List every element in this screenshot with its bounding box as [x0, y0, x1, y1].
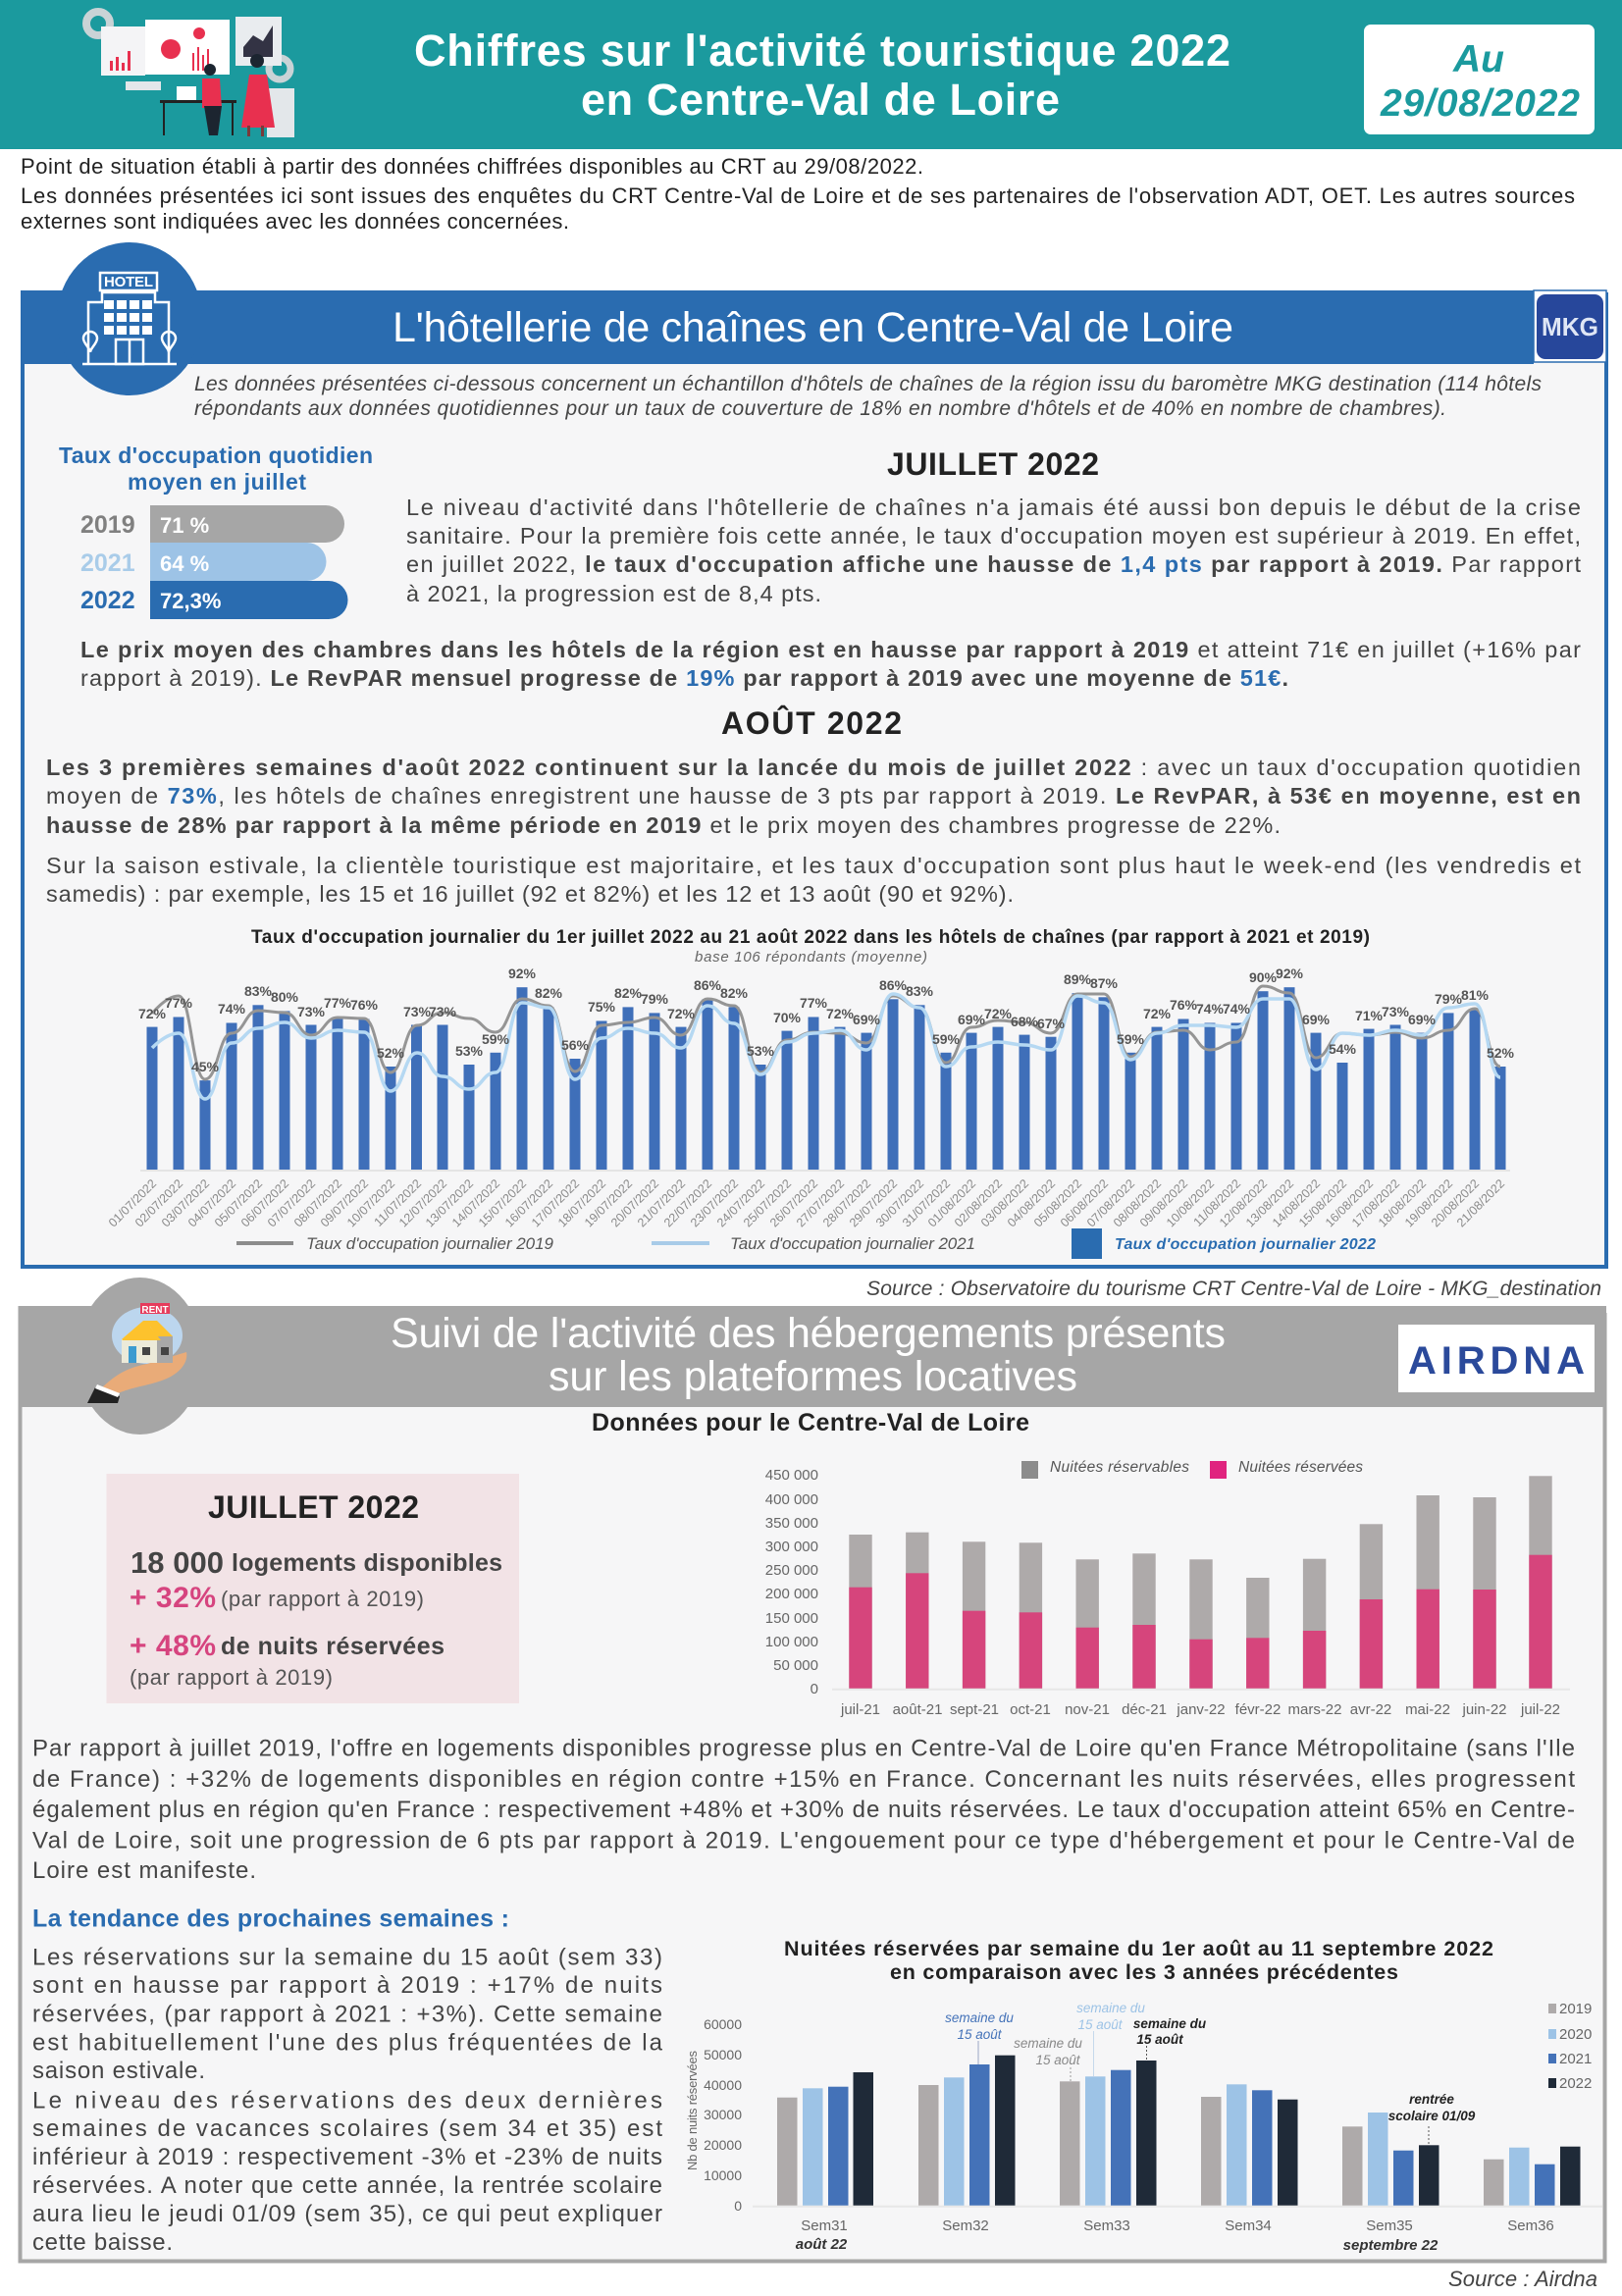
chart: nuitées réservables et réservées: août-21 [893, 1701, 942, 1718]
chart: taux d'occupation journalier: 10/08/2022 [1164, 1176, 1217, 1229]
chart: nuitées par semaine: Sem35 [1366, 2218, 1413, 2234]
chart: nuitées réservables et réservées: déc-21 [1122, 1701, 1167, 1718]
chart: taux d'occupation journalier: Taux d'occupation journalier du 1er juillet 2022 au 21 août 2022 dans les hôtels de chaînes (par rapport à 2021 et 2019) [251, 927, 1370, 948]
chart: nuitées réservables et réservées: avr-22 [1350, 1701, 1391, 1718]
chart: nuitées réservables et réservées: juil-21 [840, 1701, 880, 1718]
chart: taux d'occupation journalier: 08/07/2022 [291, 1176, 344, 1229]
chart: nuitées réservables et réservées: nov-21 [1065, 1701, 1110, 1718]
chart: nuitées réservables et réservées: sept-21 [950, 1701, 999, 1718]
chart: taux d'occupation journalier: 05/08/2022 [1031, 1176, 1084, 1229]
text block: août: samedis) : par exemple, les 15 et 16 juillet (92 et 82%) et les 12 et 13 août (90 et 92%). [46, 881, 1014, 907]
icon: house in hand: RENT [141, 1305, 169, 1316]
chart: taux d'occupation journalier: 54% [1329, 1041, 1357, 1057]
section header bar [21, 290, 1534, 364]
chart: taux d'occupation journalier: 77% [800, 995, 828, 1011]
chart: taux d'occupation journalier: 07/08/2022 [1084, 1176, 1137, 1229]
title [414, 26, 1230, 125]
chart: taux d'occupation journalier: 18/08/2022 [1376, 1176, 1429, 1229]
chart: taux d'occupation journalier: 56% [561, 1037, 590, 1053]
chart: taux d'occupation journalier: 74% [1223, 1001, 1251, 1017]
chart legend: Taux d'occupation journalier 2019 [306, 1234, 554, 1253]
chart: taux d'occupation journalier: 07/07/2022 [265, 1176, 318, 1229]
chart legend: Taux d'occupation journalier 2022 [1115, 1236, 1376, 1253]
text block: tendance: réservées, (par rapport à 2021 : +3%). Cette semaine [32, 2002, 662, 2027]
chart: nuitées réservables et réservées: févr-22 [1235, 1701, 1281, 1718]
chart: nuitées réservables et réservées: 400 000 [765, 1491, 818, 1508]
text block: juillet: en juillet 2022, le taux d'occupation affiche une hausse de 1,4 pts par rapport à 2019. Par rapport [406, 551, 1581, 577]
chart: nuitées réservables et réservées: 50 000 [773, 1657, 818, 1674]
chart: taux d'occupation journalier [106, 927, 1515, 1259]
chart: taux d'occupation journalier: 77% [324, 995, 352, 1011]
chart: taux d'occupation journalier: 73% [1382, 1004, 1410, 1019]
chart: nuitées par semaine: Sem32 [942, 2218, 989, 2234]
chart: taux d'occupation journalier: 10/07/2022 [344, 1176, 397, 1229]
date box: 29/08/2022 [1380, 82, 1580, 125]
text block: juillet: sanitaire. Pour la première fois cette année, le taux d'occupation moyen est supérieur à 2019. En effet, [406, 523, 1581, 548]
chart: taux d'occupation journalier: 26/07/2022 [767, 1176, 820, 1229]
chart: taux d'occupation journalier: 45% [191, 1059, 220, 1074]
chart: taux d'occupation journalier: 12/07/2022 [396, 1176, 449, 1229]
chart: nuitées par semaine: Nuitées réservées par semaine du 1er août au 11 septembre 2022 [784, 1937, 1493, 1960]
chart: taux d'occupation journalier: 72% [138, 1006, 167, 1021]
intro text [21, 154, 1575, 234]
chart: taux d'occupation journalier: 21/07/2022 [635, 1176, 688, 1229]
chart: taux d'occupation journalier: 19/07/2022 [582, 1176, 635, 1229]
callout: juillet 2022 key figures: (par rapport à 2019) [130, 1665, 333, 1690]
text block: août: Sur la saison estivale, la clientèle touristique est majoritaire, et les taux d'occupation sont plus haut le week-end (les vendredis et [46, 853, 1581, 878]
chart: nuitées par semaine: 10000 [704, 2167, 742, 2183]
chart: taux d'occupation journalier: 82% [720, 985, 749, 1001]
chart: taux d'occupation journalier: 19/08/2022 [1402, 1176, 1455, 1229]
chart: nuitées réservables et réservées: 200 000 [765, 1586, 818, 1602]
chart: taux d'occupation journalier: 15/08/2022 [1296, 1176, 1349, 1229]
chart: taux d'occupation journalier: 04/07/2022 [185, 1176, 238, 1229]
chart: taux d'occupation journalier: 59% [932, 1031, 961, 1047]
chart: taux d'occupation journalier: 25/07/2022 [741, 1176, 794, 1229]
icon: hotel [57, 242, 202, 395]
annotation: rentrée scolaire: scolaire 01/09 [1388, 2109, 1476, 2123]
intro text: Point de situation établi à partir des données chiffrées disponibles au CRT au 29/08/2022. [21, 154, 923, 179]
chart: taux d'occupation journalier: 04/08/2022 [1005, 1176, 1058, 1229]
chart: taux d'occupation journalier: 23/07/2022 [688, 1176, 741, 1229]
panel: hôtellerie de chaînes [21, 242, 1606, 1267]
chart: taux d'occupation journalier: 76% [1170, 997, 1198, 1013]
chart legend: 2022 [1559, 2075, 1592, 2092]
chart: taux d'occupation journalier: 69% [853, 1012, 881, 1027]
chart: nuitées réservables et réservées: mai-22 [1405, 1701, 1450, 1718]
icon: people analysing dashboards [86, 12, 294, 137]
logo: AirDNA [1398, 1325, 1595, 1392]
text block: analyse juillet: de France) : +32% de logements disponibles en région contre +15% en France. Concernant les nuits réservées, elles progressent [32, 1766, 1575, 1793]
chart: taux d'occupation journalier: 71% [1355, 1008, 1384, 1023]
chart: taux d'occupation journalier: 05/07/2022 [212, 1176, 265, 1229]
chart: taux d'occupation journalier: 17/07/2022 [529, 1176, 582, 1229]
chart: taux d'occupation moyen en juillet: 2019 [80, 511, 135, 539]
chart: taux d'occupation journalier: 90% [1249, 969, 1278, 985]
callout: juillet 2022 key figures [106, 1474, 519, 1703]
callout: juillet 2022 key figures: 18 000 [131, 1545, 224, 1580]
text block: juillet [80, 495, 1581, 691]
chart: taux d'occupation journalier: 11/08/2022 [1191, 1176, 1243, 1229]
chart: nuitées par semaine [685, 1937, 1602, 2254]
text block: tendance: Le niveau des réservations des deux dernières [32, 2088, 662, 2113]
chart: taux d'occupation journalier: 69% [1302, 1012, 1331, 1027]
italic methodology note: répondants aux données quotidiennes pour un taux de couverture de 18% en nombre d'hôtels et de 40% en nombre de chambres). [194, 397, 1446, 420]
icon: house in hand [77, 1278, 202, 1435]
panel: plateformes locatives [18, 1278, 1606, 2261]
chart: taux d'occupation journalier: 01/08/2022 [925, 1176, 978, 1229]
heading: tendance: La tendance des prochaines semaines : [32, 1905, 509, 1933]
text block: août: moyen de 73%, les hôtels de chaînes enregistrent une hausse de 3 pts par rapport à 2019. Le RevPAR, à 53€ en moyenne, est en [46, 783, 1581, 809]
chart: taux d'occupation journalier: 77% [165, 995, 193, 1011]
chart: taux d'occupation journalier: 80% [271, 989, 299, 1005]
chart: taux d'occupation journalier: 73% [403, 1004, 432, 1019]
chart: nuitées par semaine: 50000 [704, 2047, 742, 2062]
chart: taux d'occupation journalier: 14/08/2022 [1270, 1176, 1323, 1229]
chart: taux d'occupation journalier: 69% [958, 1012, 986, 1027]
chart: taux d'occupation journalier: 52% [1487, 1045, 1515, 1061]
text block: tendance: est habituellement l'une des plus fréquentées de la [32, 2029, 663, 2057]
chart: taux d'occupation journalier: 21/08/2022 [1454, 1176, 1507, 1229]
chart: taux d'occupation moyen en juillet [59, 443, 373, 619]
chart: taux d'occupation journalier: 72% [667, 1006, 696, 1021]
chart: nuitées par semaine: Sem31 [801, 2218, 848, 2234]
text block: tendance [32, 1945, 663, 2256]
chart: taux d'occupation journalier: 09/07/2022 [318, 1176, 371, 1229]
heading: juillet 2022: JUILLET 2022 [887, 446, 1099, 482]
chart legend [236, 1228, 1376, 1259]
chart: nuitées par semaine: 60000 [704, 2016, 742, 2032]
chart: nuitées par semaine: 20000 [704, 2137, 742, 2153]
text block: tendance: inférieur à 2019 : respectivement -3% et -23% de nuits [32, 2144, 662, 2170]
chart legend [1548, 2001, 1592, 2092]
chart: nuitées par semaine: 40000 [704, 2077, 742, 2093]
chart legend: Taux d'occupation journalier 2021 [730, 1234, 975, 1253]
chart: taux d'occupation journalier: 16/08/2022 [1323, 1176, 1376, 1229]
text block: juillet: Le niveau d'activité dans l'hôtellerie de chaînes n'a jamais été aussi bon depuis le début de la crise [406, 495, 1581, 520]
callout: juillet 2022 key figures: logements disponibles [232, 1549, 502, 1577]
date box: Au [1452, 38, 1504, 80]
chart: taux d'occupation moyen en juillet: 2022 [80, 587, 135, 614]
chart: nuitées réservables et réservées: 250 000 [765, 1562, 818, 1579]
chart: taux d'occupation moyen en juillet: 64 % [160, 551, 209, 576]
chart: taux d'occupation journalier: 76% [350, 997, 379, 1013]
text block: août [46, 755, 1581, 907]
text block: juillet: rapport à 2019). Le RevPAR mensuel progresse de 19% par rapport à 2019 avec une moyenne de 51€. [80, 665, 1288, 691]
chart: taux d'occupation journalier: 75% [588, 999, 616, 1015]
chart: taux d'occupation journalier: 24/07/2022 [714, 1176, 767, 1229]
chart: taux d'occupation journalier: 82% [535, 985, 563, 1001]
section header bar [18, 1306, 1606, 1407]
chart: taux d'occupation journalier: 67% [1037, 1016, 1066, 1031]
text block: analyse juillet [32, 1735, 1575, 1884]
chart: taux d'occupation journalier: 53% [747, 1043, 775, 1059]
chart: taux d'occupation journalier: 03/07/2022 [159, 1176, 212, 1229]
annotation: semaine du 15 août: 15 août [1136, 2032, 1183, 2047]
text block: tendance: sont en hausse par rapport à 2019 : +17% de nuits [32, 1972, 662, 1999]
chart: nuitées par semaine: 30000 [704, 2107, 742, 2122]
chart: taux d'occupation journalier: 13/07/2022 [423, 1176, 476, 1229]
section header bar: sur les plateformes locatives [549, 1353, 1077, 1400]
chart: taux d'occupation journalier: 79% [1435, 991, 1463, 1007]
chart legend: 2019 [1559, 2001, 1592, 2017]
annotation: semaine du 15 août: semaine du [1014, 2036, 1082, 2051]
chart: nuitées par semaine: Sem33 [1083, 2218, 1130, 2234]
chart: taux d'occupation journalier: 72% [984, 1006, 1013, 1021]
heading: août 2022: AOÛT 2022 [721, 705, 902, 741]
annotation: rentrée scolaire: rentrée [1409, 2092, 1454, 2107]
chart: nuitées par semaine: septembre 22 [1343, 2237, 1439, 2254]
chart: taux d'occupation moyen en juillet: moyen en juillet [128, 469, 306, 495]
chart legend: 2020 [1559, 2026, 1592, 2043]
chart: taux d'occupation journalier: 13/08/2022 [1243, 1176, 1296, 1229]
text block: analyse juillet: également plus en région qu'en France : respectivement +48% et +30% de nuits réservées. Le taux d'occupation atteint 65% en Centre- [32, 1797, 1575, 1823]
chart: taux d'occupation journalier: 72% [1143, 1006, 1172, 1021]
chart: nuitées réservables et réservées: janv-22 [1176, 1701, 1226, 1718]
chart: taux d'occupation journalier: 02/08/2022 [952, 1176, 1005, 1229]
heading: données Centre-Val de Loire: Données pour le Centre-Val de Loire [592, 1409, 1029, 1436]
source: hôtellerie: Source : Observatoire du tourisme CRT Centre-Val de Loire - MKG_destination [866, 1278, 1601, 1300]
annotation: semaine du 15 août: 15 août [1077, 2017, 1124, 2032]
chart: taux d'occupation journalier: 06/08/2022 [1058, 1176, 1111, 1229]
chart legend: Nuitées réservables [1050, 1459, 1189, 1476]
chart: taux d'occupation journalier: 74% [1196, 1001, 1225, 1017]
text block: août: hausse de 28% par rapport à la même période en 2019 et le prix moyen des chambres progresse de 22%. [46, 812, 1281, 838]
chart: taux d'occupation journalier: 87% [1090, 975, 1119, 991]
chart: taux d'occupation journalier: 17/08/2022 [1349, 1176, 1402, 1229]
chart: nuitées réservables et réservées: 450 000 [765, 1467, 818, 1484]
chart: nuitées réservables et réservées [765, 1459, 1570, 1718]
chart: taux d'occupation journalier: 12/08/2022 [1217, 1176, 1270, 1229]
text block: tendance: saison estivale. [32, 2058, 205, 2084]
chart: taux d'occupation journalier: 69% [1408, 1012, 1437, 1027]
chart: nuitées réservables et réservées: mars-22 [1287, 1701, 1342, 1718]
chart: taux d'occupation journalier: 14/07/2022 [449, 1176, 502, 1229]
annotation: semaine du 15 août: 15 août [957, 2027, 1003, 2042]
chart: taux d'occupation journalier: 73% [429, 1004, 457, 1019]
chart: taux d'occupation journalier: 92% [508, 965, 537, 981]
chart: taux d'occupation journalier: 73% [297, 1004, 326, 1019]
chart: nuitées réservables et réservées: juin-22 [1461, 1701, 1507, 1718]
chart: nuitées réservables et réservées: 300 000 [765, 1539, 818, 1555]
chart: taux d'occupation journalier: 28/07/2022 [820, 1176, 873, 1229]
chart: taux d'occupation journalier: 08/08/2022 [1111, 1176, 1164, 1229]
chart: nuitées réservables et réservées: 150 000 [765, 1610, 818, 1627]
chart: taux d'occupation journalier: 59% [482, 1031, 510, 1047]
text block: tendance: cette baisse. [32, 2229, 173, 2256]
chart: nuitées par semaine: Sem36 [1507, 2218, 1554, 2234]
chart: taux d'occupation journalier: 53% [455, 1043, 484, 1059]
chart: taux d'occupation journalier: 59% [1117, 1031, 1145, 1047]
source: Airdna: Source : Airdna [1448, 2267, 1597, 2291]
annotation: semaine du 15 août: 15 août [1035, 2053, 1081, 2067]
chart: nuitées réservables et réservées: oct-21 [1010, 1701, 1051, 1718]
header banner [0, 0, 1622, 149]
chart: nuitées par semaine: 0 [734, 2198, 742, 2214]
chart: taux d'occupation journalier: 92% [1276, 965, 1304, 981]
chart: taux d'occupation journalier: 01/07/2022 [106, 1176, 159, 1229]
text block: analyse juillet: Loire est manifeste. [32, 1857, 256, 1884]
chart: taux d'occupation journalier: 72% [826, 1006, 855, 1021]
text block: août: Les 3 premières semaines d'août 2022 continuent sur la lancée du mois de juillet 2022 : avec un taux d'occupation quotidien [46, 755, 1581, 780]
chart: taux d'occupation journalier: 06/07/2022 [238, 1176, 291, 1229]
annotation: rentrée scolaire [1388, 2092, 1476, 2145]
intro text: Les données présentées ici sont issues des enquêtes du CRT Centre-Val de Loire et de ses partenaires de l'observation ADT, OET. Les autres sources [21, 183, 1575, 208]
chart: taux d'occupation journalier: 11/07/2022 [372, 1176, 424, 1229]
annotation: semaine du 15 août: semaine du [1076, 2001, 1145, 2015]
chart: taux d'occupation journalier: 15/07/2022 [476, 1176, 529, 1229]
chart: taux d'occupation journalier: 09/08/2022 [1137, 1176, 1190, 1229]
text block: juillet: Le prix moyen des chambres dans les hôtels de la région est en hausse par rapport à 2019 et atteint 71€ en juillet (+16% par [80, 637, 1581, 662]
annotation: semaine du 15 août [945, 2001, 1207, 2081]
chart: taux d'occupation journalier: 16/07/2022 [502, 1176, 555, 1229]
chart: taux d'occupation journalier: 22/07/2022 [661, 1176, 714, 1229]
title: en Centre-Val de Loire [581, 75, 1060, 125]
text block: analyse juillet: Par rapport à juillet 2019, l'offre en logements disponibles progresse plus en Centre-Val de Loire qu'en France Métropolitaine (sans l'Ile [32, 1735, 1575, 1762]
chart: nuitées réservables et réservées: 100 000 [765, 1634, 818, 1650]
section header bar: L'hôtellerie de chaînes en Centre-Val de Loire [392, 304, 1233, 351]
chart: taux d'occupation journalier: 18/07/2022 [555, 1176, 608, 1229]
chart: nuitées par semaine: Nb de nuits réservées [685, 2051, 700, 2170]
chart: taux d'occupation journalier: 30/07/2022 [873, 1176, 926, 1229]
title: Chiffres sur l'activité touristique 2022 [414, 26, 1230, 76]
chart: taux d'occupation journalier: 03/08/2022 [978, 1176, 1031, 1229]
chart: taux d'occupation moyen en juillet: Taux d'occupation quotidien [59, 443, 373, 468]
logo: AirDNA: AIRDNA [1408, 1339, 1585, 1383]
chart: taux d'occupation journalier: base 106 répondants (moyenne) [695, 949, 927, 965]
chart: taux d'occupation journalier: 89% [1064, 971, 1092, 987]
text block: tendance: réservées. A noter que cette année, la rentrée scolaire [32, 2172, 662, 2199]
chart: taux d'occupation journalier: 86% [879, 977, 908, 993]
text block: analyse juillet: Val de Loire, soit une progression de 6 pts par rapport à 2019. L'engouement pour ce type d'hébergement et pour le Centre-Val de [32, 1827, 1575, 1854]
chart: taux d'occupation journalier: 31/07/2022 [900, 1176, 953, 1229]
chart: taux d'occupation journalier: 74% [218, 1001, 246, 1017]
chart: nuitées par semaine: août 22 [796, 2236, 848, 2253]
annotation: semaine du 15 août: semaine du [945, 2010, 1014, 2025]
chart: taux d'occupation journalier: 83% [244, 983, 273, 999]
chart: taux d'occupation journalier: 29/07/2022 [847, 1176, 900, 1229]
chart: taux d'occupation journalier: 83% [906, 983, 934, 999]
callout: juillet 2022 key figures: + 32% [130, 1582, 216, 1614]
intro text: externes sont indiquées avec les données concernées. [21, 209, 569, 234]
callout: juillet 2022 key figures: (par rapport à 2019) [221, 1587, 424, 1611]
chart: taux d'occupation journalier: 70% [773, 1010, 802, 1025]
chart: taux d'occupation journalier: 82% [614, 985, 643, 1001]
chart legend: 2021 [1559, 2051, 1592, 2067]
callout: juillet 2022 key figures: + 48% [130, 1630, 216, 1662]
chart: nuitées réservables et réservées: juil-22 [1520, 1701, 1560, 1718]
chart: taux d'occupation journalier: 20/07/2022 [608, 1176, 661, 1229]
chart: taux d'occupation moyen en juillet: 2021 [80, 549, 135, 577]
annotation: semaine du 15 août: semaine du [1133, 2016, 1207, 2031]
chart: taux d'occupation journalier: 81% [1461, 987, 1490, 1003]
icon: hotel: HOTEL [104, 274, 153, 290]
section header bar: Suivi de l'activité des hébergements présents [391, 1310, 1226, 1357]
chart: taux d'occupation journalier: 68% [1011, 1014, 1039, 1029]
chart legend: Nuitées réservées [1238, 1459, 1363, 1476]
chart: taux d'occupation journalier: 79% [641, 991, 669, 1007]
chart: taux d'occupation journalier: 27/07/2022 [794, 1176, 847, 1229]
italic methodology note [194, 373, 1543, 420]
italic methodology note: Les données présentées ci-dessous concernent un échantillon d'hôtels de chaînes de la région issu du baromètre MKG destination (114 hôtels [194, 373, 1543, 395]
chart: taux d'occupation moyen en juillet: 72,3% [160, 589, 221, 613]
chart: taux d'occupation journalier: 02/07/2022 [132, 1176, 185, 1229]
date box [1364, 25, 1595, 134]
callout: juillet 2022 key figures: de nuits réservées [221, 1633, 445, 1660]
chart legend [1021, 1459, 1363, 1479]
logo: MKG [1534, 290, 1606, 362]
chart: taux d'occupation journalier: 20/08/2022 [1429, 1176, 1482, 1229]
text block: tendance: aura lieu le jeudi 01/09 (sem 35), ce qui peut expliquer [32, 2201, 662, 2227]
text block: juillet: à 2021, la progression est de 8,4 pts. [406, 581, 821, 606]
text block: tendance: semaines de vacances scolaires (sem 34 et 35) est [32, 2115, 662, 2142]
chart: taux d'occupation moyen en juillet: 71 % [160, 513, 209, 538]
callout: juillet 2022 key figures: JUILLET 2022 [208, 1489, 419, 1525]
text block: tendance: Les réservations sur la semaine du 15 août (sem 33) [32, 1945, 662, 1970]
chart: taux d'occupation journalier: 52% [377, 1045, 405, 1061]
chart: nuitées réservables et réservées: 350 000 [765, 1515, 818, 1532]
chart: nuitées par semaine: Sem34 [1225, 2218, 1272, 2234]
logo: MKG: MKG [1542, 312, 1598, 341]
chart: nuitées par semaine: en comparaison avec les 3 années précédentes [890, 1960, 1398, 1984]
chart: nuitées réservables et réservées: 0 [811, 1681, 818, 1697]
chart: taux d'occupation journalier: 86% [694, 977, 722, 993]
